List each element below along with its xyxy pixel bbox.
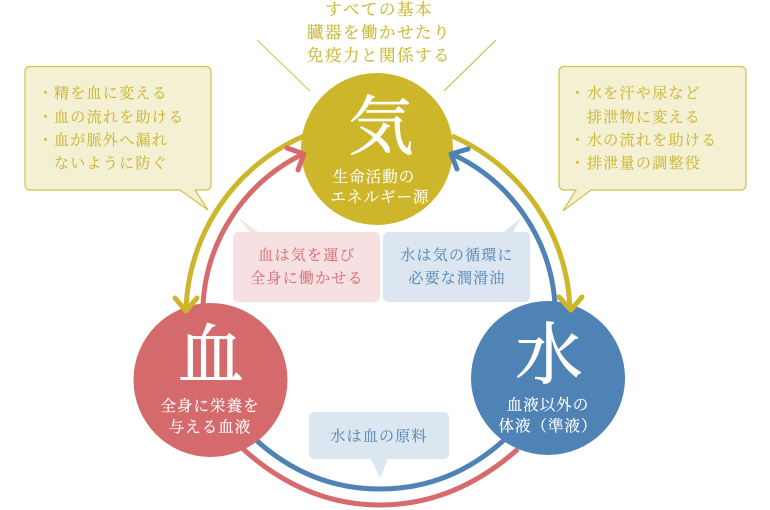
- arrow: qi to water (yellow): [452, 136, 582, 310]
- panel: water is source of blood: [309, 412, 449, 478]
- panel: water functions of qi: 水を汗や尿など: [587, 85, 701, 102]
- panel: water is source of blood: 水は血の原料: [330, 428, 428, 445]
- panel: water functions of qi: ・: [570, 156, 586, 172]
- callout line left: [257, 40, 310, 91]
- panel: blood carries qi: 全身に働かせる: [250, 270, 364, 287]
- panel: blood functions of qi: [25, 66, 211, 210]
- heading: qi description: [307, 0, 451, 65]
- qi circle: [301, 73, 453, 225]
- heading: qi description: 臓器を働かせたり: [307, 23, 451, 42]
- water character: 水: [516, 319, 582, 393]
- qi caption: エネルギー源: [330, 188, 430, 206]
- heading: qi description: 免疫力と関係する: [307, 46, 451, 65]
- panel: water functions of qi: ・: [570, 86, 586, 102]
- panel: blood carries qi: [233, 218, 380, 302]
- panel: water functions of qi: 水の流れを助ける: [587, 132, 717, 149]
- heading: qi description: すべての基本: [325, 0, 433, 19]
- blood circle: [134, 303, 288, 457]
- arrow: water to blood (blue arc): [256, 440, 504, 489]
- panel: blood functions of qi: ・: [38, 133, 54, 149]
- panel: blood functions of qi: ないように防ぐ: [54, 154, 168, 172]
- panel: water functions of qi: 排泄量の調整役: [587, 154, 701, 172]
- panel: water functions of qi: [559, 66, 746, 211]
- arrow: water to qi (blue): [451, 149, 555, 305]
- panel: water functions of qi: 排泄物に変える: [587, 108, 701, 126]
- panel: water functions of qi: ・: [570, 133, 586, 149]
- water caption: 体液（準液）: [498, 417, 598, 435]
- qi character: 気: [348, 92, 414, 164]
- panel: water lubricates qi: 必要な潤滑油: [408, 270, 506, 287]
- panel: blood carries qi: 血は気を運び: [258, 247, 356, 264]
- water circle: [471, 301, 625, 455]
- panel: water lubricates qi: 水は気の循環に: [400, 247, 514, 264]
- water caption: [498, 396, 598, 435]
- blood caption: 与える血液: [169, 418, 251, 436]
- panel: blood functions of qi: ・: [38, 86, 54, 102]
- blood caption: 全身に栄養を: [160, 397, 260, 415]
- blood character: 血: [178, 320, 244, 393]
- panel: blood functions of qi: 血が脈外へ漏れ: [54, 132, 168, 149]
- panel: water lubricates qi: [383, 218, 530, 302]
- arrow: blood to water (red arc): [243, 449, 518, 505]
- panel: blood functions of qi: ・: [38, 110, 54, 126]
- water caption: 血液以外の: [507, 396, 589, 414]
- qi caption: 生命活動の: [333, 168, 415, 186]
- qi caption: [330, 168, 430, 206]
- panel: blood functions of qi: 血の流れを助ける: [54, 109, 184, 126]
- blood caption: [160, 397, 260, 436]
- arrow: qi to blood (yellow): [175, 136, 304, 311]
- arrow: blood to qi (red): [203, 148, 304, 305]
- panel: blood functions of qi: 精を血に変える: [54, 85, 168, 102]
- callout line right: [444, 40, 496, 91]
